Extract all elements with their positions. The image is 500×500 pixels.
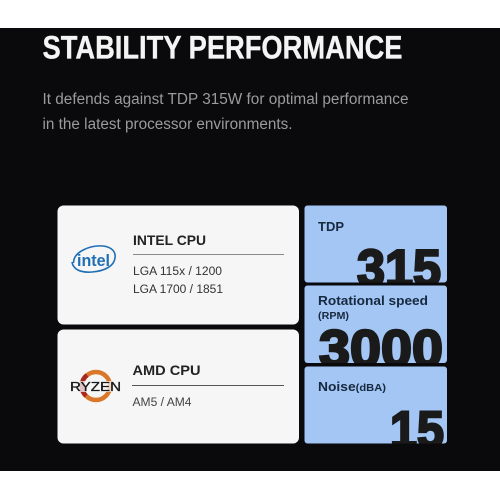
label: RPM: (RPM) <box>318 310 349 322</box>
divider <box>133 254 284 255</box>
value: 3000: 3000 <box>319 320 443 378</box>
icon: Intel logo <box>72 246 115 272</box>
label: TDP: TDP <box>318 220 344 234</box>
heading: AMD CPU: AMD CPU <box>132 362 200 378</box>
heading: Intel CPU: INTEL CPU <box>133 232 206 248</box>
icon: Intel logo: intel <box>77 251 110 270</box>
panel: TDP <box>304 206 447 282</box>
panel: Noise <box>304 366 447 444</box>
label: Rotational speed: Rotational speed <box>318 293 428 308</box>
Intel sockets <box>133 266 223 296</box>
panel: Rotational speed <box>304 286 447 363</box>
Intel sockets: LGA 1700 / 1851 <box>133 284 223 296</box>
panel: AMD CPU <box>58 330 299 444</box>
value: 15: 15 <box>390 402 444 460</box>
value: 315: 315 <box>357 240 441 298</box>
description <box>42 91 408 133</box>
panel: Intel CPU <box>58 206 299 324</box>
description: It defends against TDP 315W for optimal performance <box>42 91 408 108</box>
label: Noise: Noise(dBA) <box>318 379 386 394</box>
description: in the latest processor environments. <box>42 116 292 133</box>
Intel sockets: LGA 115x / 1200 <box>133 266 222 278</box>
icon: Ryzen logo: RYZEN <box>70 379 121 394</box>
AMD sockets: AM5 / AM4 <box>132 397 192 409</box>
divider <box>132 385 284 386</box>
icon: Ryzen logo <box>70 372 121 400</box>
title: STABILITY PERFORMANCE <box>42 29 402 66</box>
